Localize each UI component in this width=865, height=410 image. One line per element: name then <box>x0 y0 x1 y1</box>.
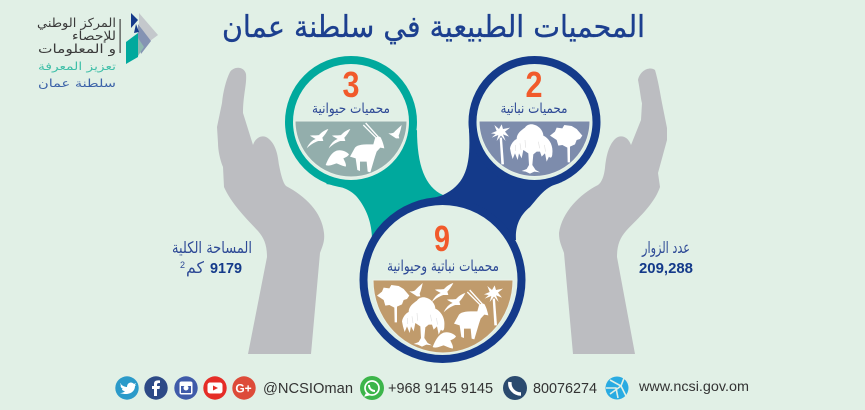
logo tagline: تعزيز المعرفة <box>38 60 116 73</box>
label: محميات حيوانية <box>312 101 390 117</box>
footer: contact bar <box>115 376 749 400</box>
icon: google plus <box>232 376 256 400</box>
stat: visitors: عدد الزوار <box>641 238 690 258</box>
left hand <box>217 68 324 354</box>
phone number: 80076274 <box>533 380 597 397</box>
whatsapp number: +968 9145 9145 <box>388 380 493 397</box>
label: محميات نباتية <box>500 101 568 117</box>
icon: google plus: G+ <box>235 382 252 396</box>
logo name: و المعلومات <box>38 41 116 57</box>
logo country: سلطنة عمان <box>38 77 116 90</box>
icon: youtube <box>203 376 227 400</box>
navy ring <box>364 201 522 359</box>
number 3: 3 <box>342 64 360 105</box>
stat: total area <box>172 238 252 277</box>
icon: phone <box>503 376 527 400</box>
stat: visitors: 209,288 <box>639 260 693 277</box>
stat: total area: 2 <box>180 260 185 270</box>
panel: plant and animal reserves <box>364 201 522 359</box>
plant scene <box>479 121 590 176</box>
icon: instagram <box>174 376 198 400</box>
website: www.ncsi.gov.om <box>638 378 749 394</box>
logo name: للإحصاء <box>72 28 116 43</box>
connector: teal <box>326 130 443 240</box>
teal ring <box>289 60 413 184</box>
logo: NCSI <box>37 13 158 90</box>
number 2: 2 <box>526 64 542 105</box>
panel: plant reserves <box>472 60 596 184</box>
logo name: المركز الوطني <box>37 15 116 31</box>
label: محميات نباتية وحيوانية <box>387 257 499 275</box>
right hand <box>559 68 667 354</box>
combined scene <box>373 280 513 353</box>
logo divider <box>120 19 121 53</box>
animal scene <box>295 121 407 177</box>
title: المحميات الطبيعية في سلطنة عمان <box>222 10 645 45</box>
stat: total area: 9179 <box>210 260 242 277</box>
stat: total area: كم <box>186 258 204 277</box>
icon: whatsapp <box>360 376 384 400</box>
icon: twitter <box>115 376 139 400</box>
logo mark <box>126 13 158 64</box>
icon: globe <box>606 376 628 400</box>
handle: @NCSIOman <box>263 380 353 397</box>
panel: animal reserves <box>289 60 413 184</box>
stat: total area: المساحة الكلية <box>172 238 252 257</box>
logo name <box>37 15 116 57</box>
blue ring <box>472 60 596 184</box>
stat: visitors <box>639 238 693 277</box>
connector: blue <box>420 130 562 240</box>
number 9: 9 <box>434 218 450 259</box>
icon: facebook <box>144 376 168 400</box>
